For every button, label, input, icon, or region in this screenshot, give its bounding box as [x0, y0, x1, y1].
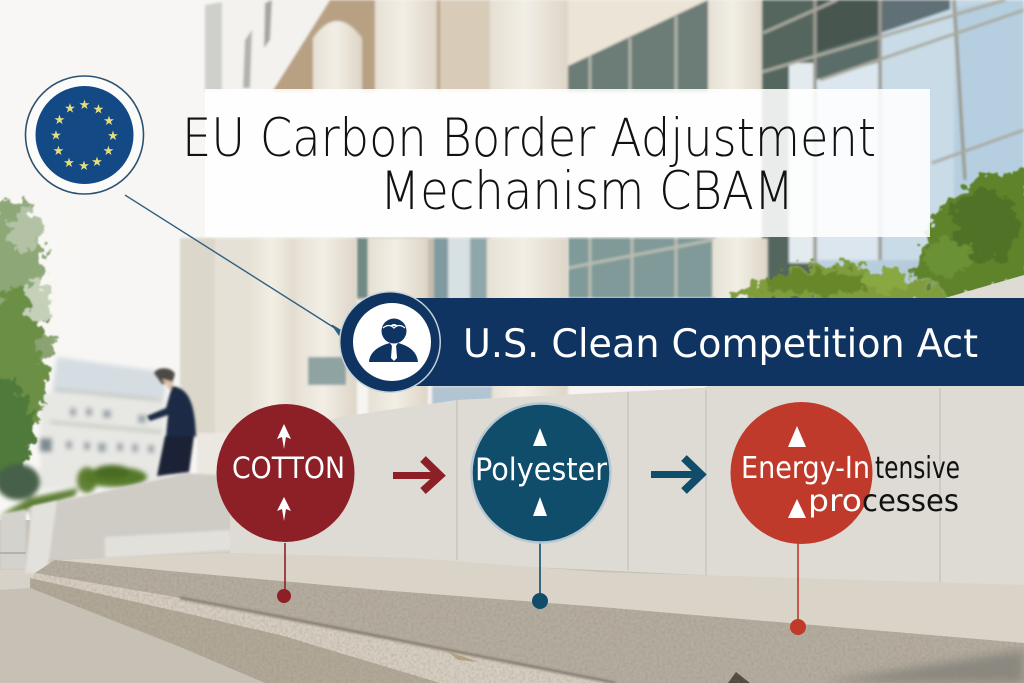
title text: EU Carbon Border Adjustment [182, 108, 876, 169]
step one top surface [55, 553, 1024, 643]
node: cotton [216, 404, 354, 603]
arrow: cotton to polyester [393, 459, 440, 491]
icon: EU flag badge: ★ [103, 144, 114, 159]
icon: EU flag badge: ★ [107, 129, 119, 144]
step two top surface [30, 573, 615, 683]
connector line from EU badge to banner [125, 195, 342, 335]
icon: EU flag badge: ★ [103, 114, 115, 129]
icon: EU flag badge: ★ [79, 98, 90, 113]
icon: EU flag badge: ★ [63, 156, 75, 171]
photo: tree and shrubs on the left [0, 200, 147, 515]
photo: man on steps looking at phone [147, 368, 196, 476]
title text: Mechanism CBAM [380, 161, 794, 222]
step two front [30, 578, 440, 683]
photo: right shrubs [728, 170, 1024, 304]
icon: EU flag badge: ★ [50, 128, 62, 144]
node: polyester [472, 404, 610, 609]
energy label: cesses [862, 484, 959, 519]
icon: up arrows [277, 424, 291, 521]
banner text: U.S. Clean Competition Act [463, 322, 978, 367]
icon: person in suit [369, 318, 418, 362]
icon: EU flag badge [26, 76, 144, 194]
energy label: pro [808, 484, 862, 519]
icon: EU flag badge: ★ [93, 102, 104, 118]
icon: triangles [533, 428, 547, 516]
icon: triangles [788, 426, 806, 518]
cotton label: COTTON [232, 451, 345, 485]
arrow: polyester to energy [651, 458, 701, 491]
photo: walkway, walls and steps [0, 275, 1024, 683]
energy label [741, 451, 960, 519]
node: energy-intensive processes [730, 402, 960, 635]
polyester label: Polyester [475, 452, 607, 488]
photo: upper building facade and ceiling [205, 0, 1024, 300]
energy label: Energy-In [741, 451, 870, 486]
energy label: tensive [875, 451, 960, 486]
photo: far building on the left [40, 357, 165, 490]
icon: EU flag badge: ★ [53, 144, 64, 159]
glass curtain wall [762, 0, 1024, 300]
photo: lower columns [180, 238, 768, 485]
title text [182, 108, 876, 222]
icon: EU flag badge: ★ [54, 113, 65, 128]
icon: EU flag badge: ★ [78, 159, 90, 174]
icon: EU flag badge: ★ [91, 155, 103, 170]
step one front [35, 560, 1024, 683]
banner: U.S. Clean Competition Act [339, 291, 1024, 393]
title panel [182, 89, 930, 237]
icon: EU flag badge: ★ [64, 102, 76, 116]
